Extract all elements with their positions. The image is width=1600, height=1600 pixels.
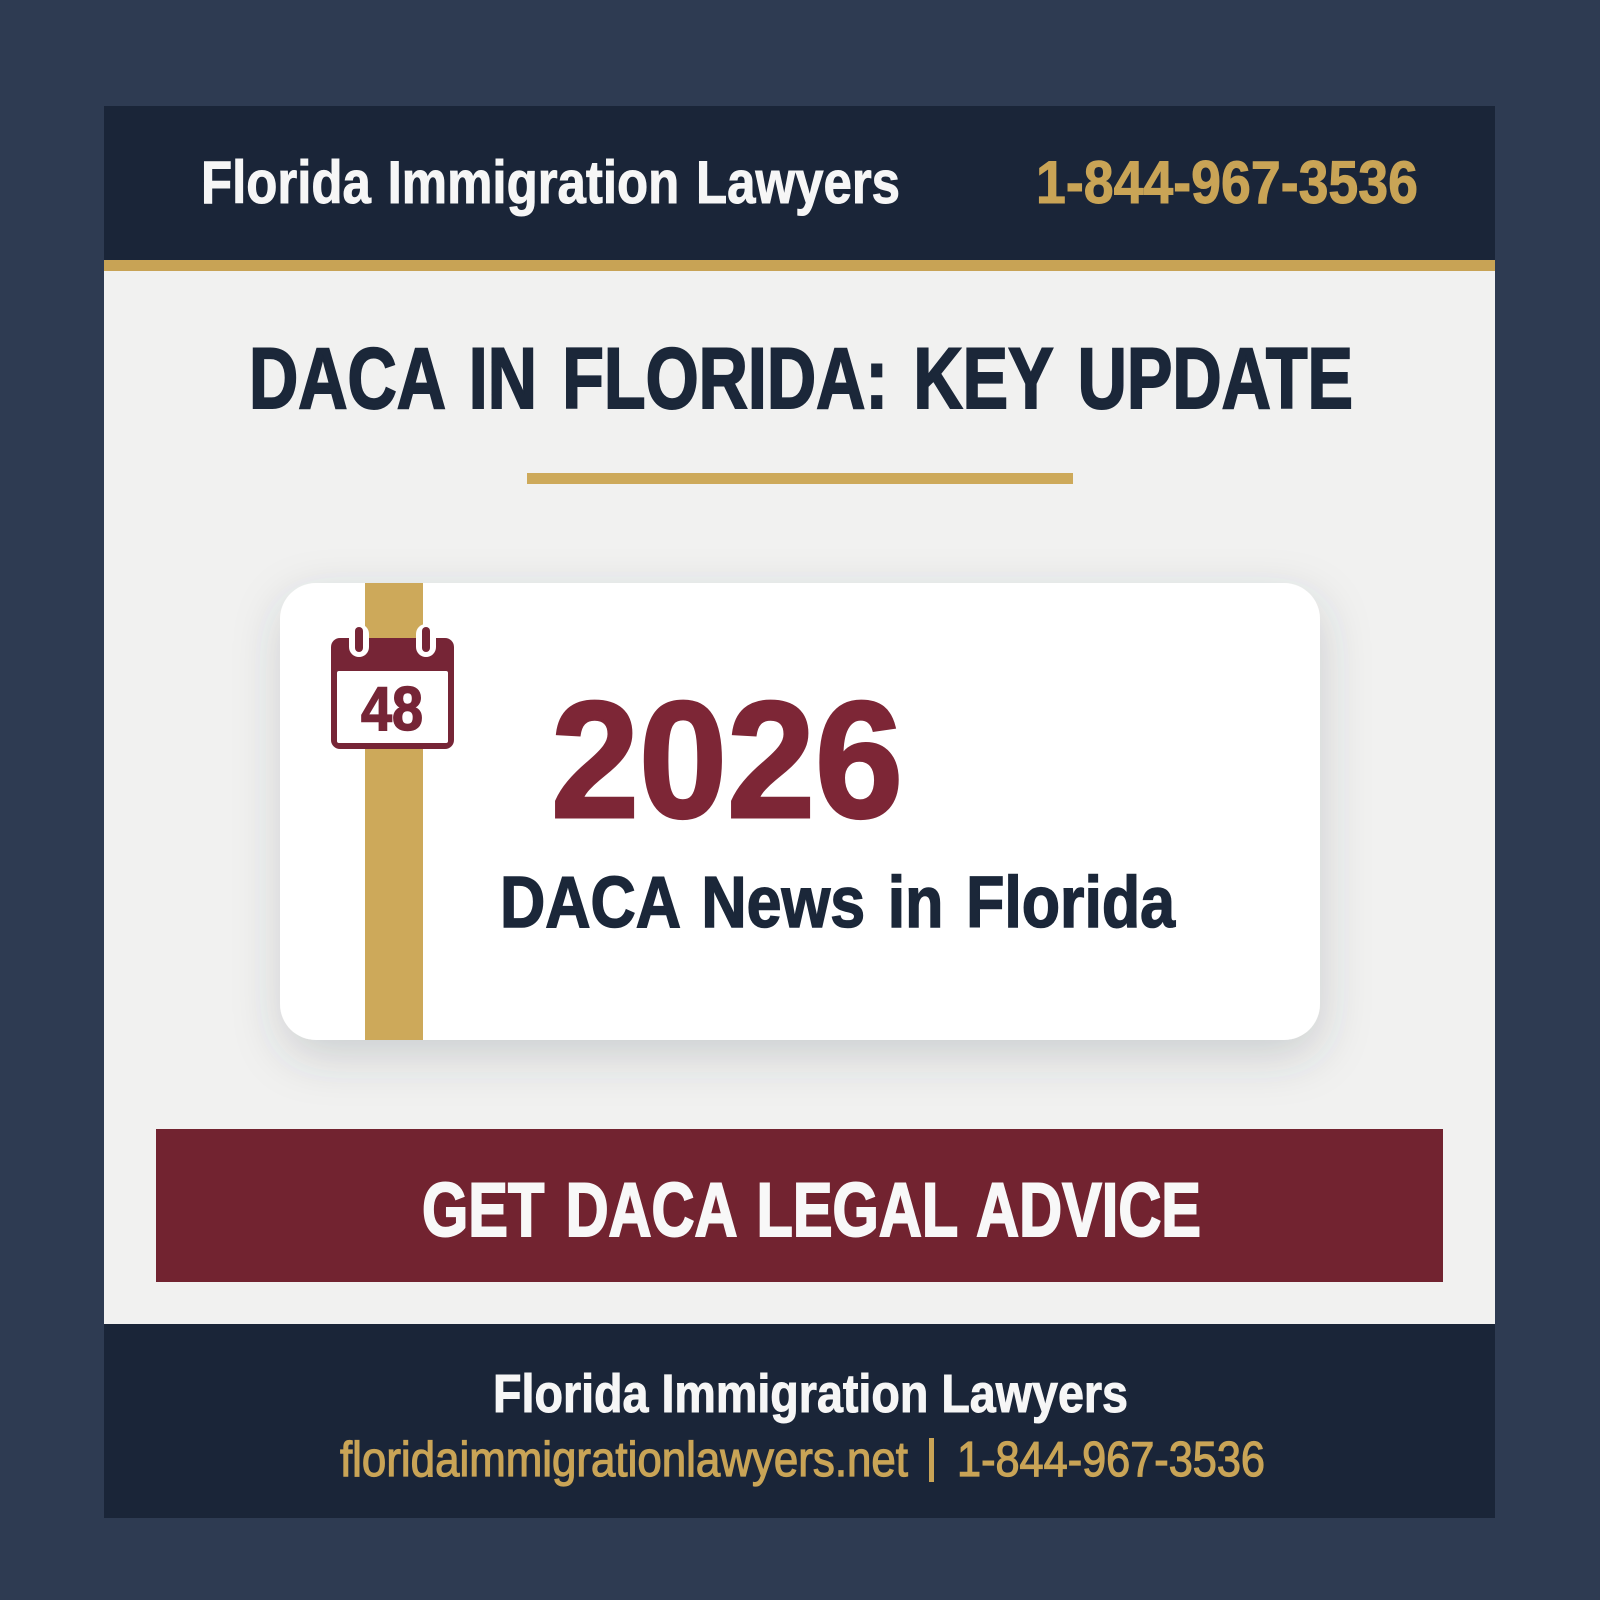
header band: [104, 106, 1495, 260]
gold header rule: [104, 260, 1495, 271]
footer separator: [929, 1438, 934, 1482]
header phone number: 1-844-967-3536: [1036, 149, 1418, 216]
call to action banner: [156, 1129, 1443, 1282]
footer phone number: 1-844-967-3536: [957, 1433, 1265, 1487]
footer band: [104, 1324, 1495, 1518]
card subtitle: DACA News in Florida: [500, 863, 1176, 943]
footer website: floridaimmigrationlawyers.net: [340, 1433, 908, 1487]
panel: news card: [280, 583, 1320, 1040]
year figure: 2026: [551, 668, 903, 853]
header firm name: Florida Immigration Lawyers: [201, 149, 900, 216]
calendar number: 48: [361, 675, 423, 744]
gold title underline: [527, 473, 1073, 484]
main panel body: [104, 271, 1495, 1324]
card background: [280, 583, 1320, 1040]
infographic canvas: [104, 106, 1495, 1518]
icon: calendar: [331, 624, 454, 749]
footer firm name: Florida Immigration Lawyers: [493, 1364, 1128, 1424]
gold vertical stripe: [365, 583, 423, 1040]
main title: DACA IN FLORIDA: KEY UPDATE: [249, 331, 1353, 427]
call to action text: GET DACA LEGAL ADVICE: [422, 1168, 1201, 1253]
